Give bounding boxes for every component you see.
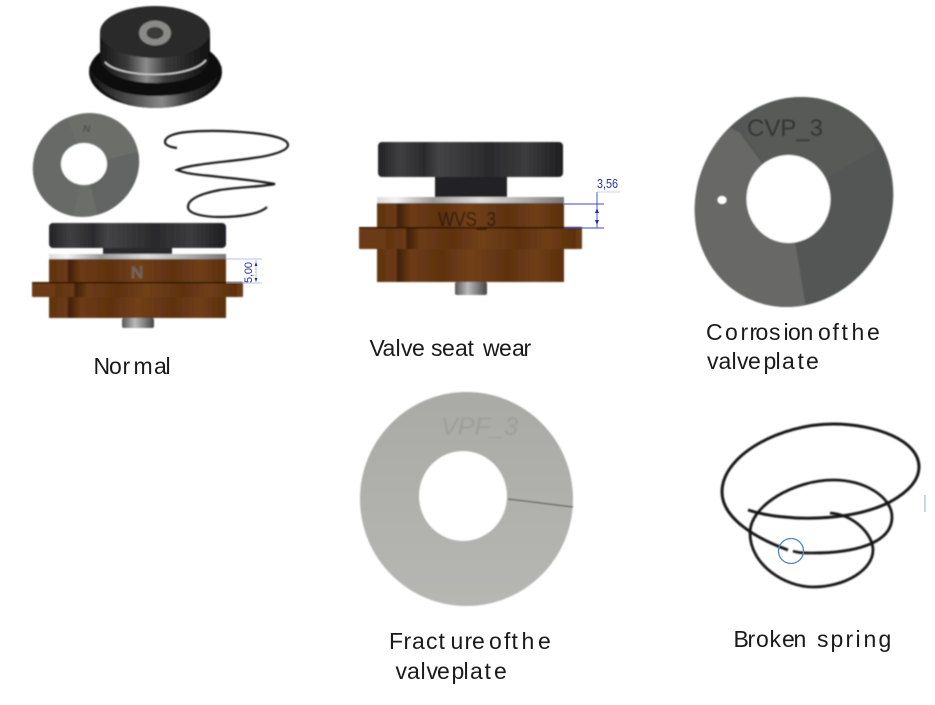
spring: normal [165, 131, 288, 217]
disc: corroded valve plate [694, 96, 894, 308]
label: Normal: Normal [94, 353, 171, 379]
dimension: 5,00 [226, 259, 262, 283]
dimension: 3,56: 3,56 [597, 176, 618, 191]
label: Corrosion of the valve plate: valve plate [707, 348, 819, 374]
disc: normal valve plate [32, 112, 140, 218]
label: Corrosion of the valve plate: Corrosion of the [706, 319, 880, 345]
assembly: normal valve side view [32, 223, 243, 328]
disc: fractured valve plate: VPF_3 [441, 413, 518, 441]
disc: normal valve plate: N [83, 124, 91, 135]
assembly: normal valve side view: N [131, 263, 143, 282]
label: Fracture of the valve plate: valve plate [396, 658, 507, 684]
photo: assembled valve, top view [89, 6, 222, 108]
label: Fracture of the valve plate [389, 628, 551, 684]
label: Broken spring: Broken spring [734, 626, 891, 652]
label: Valve seat wear: Valve seat wear [370, 335, 532, 361]
spring: broken [722, 424, 919, 587]
assembly: worn valve seat side view: WVS_3 [438, 209, 496, 231]
marker: break location circle [778, 538, 804, 564]
disc: corroded valve plate: CVP_3 [747, 115, 823, 142]
label: Fracture of the valve plate: Fracture of the [389, 628, 551, 654]
dimension: 3,56 [564, 176, 620, 228]
dimension: 5,00: 5,00 [243, 262, 255, 283]
disc: fractured valve plate [360, 392, 573, 606]
assembly: worn valve seat side view [359, 142, 582, 295]
label: Corrosion of the valve plate [706, 319, 880, 374]
